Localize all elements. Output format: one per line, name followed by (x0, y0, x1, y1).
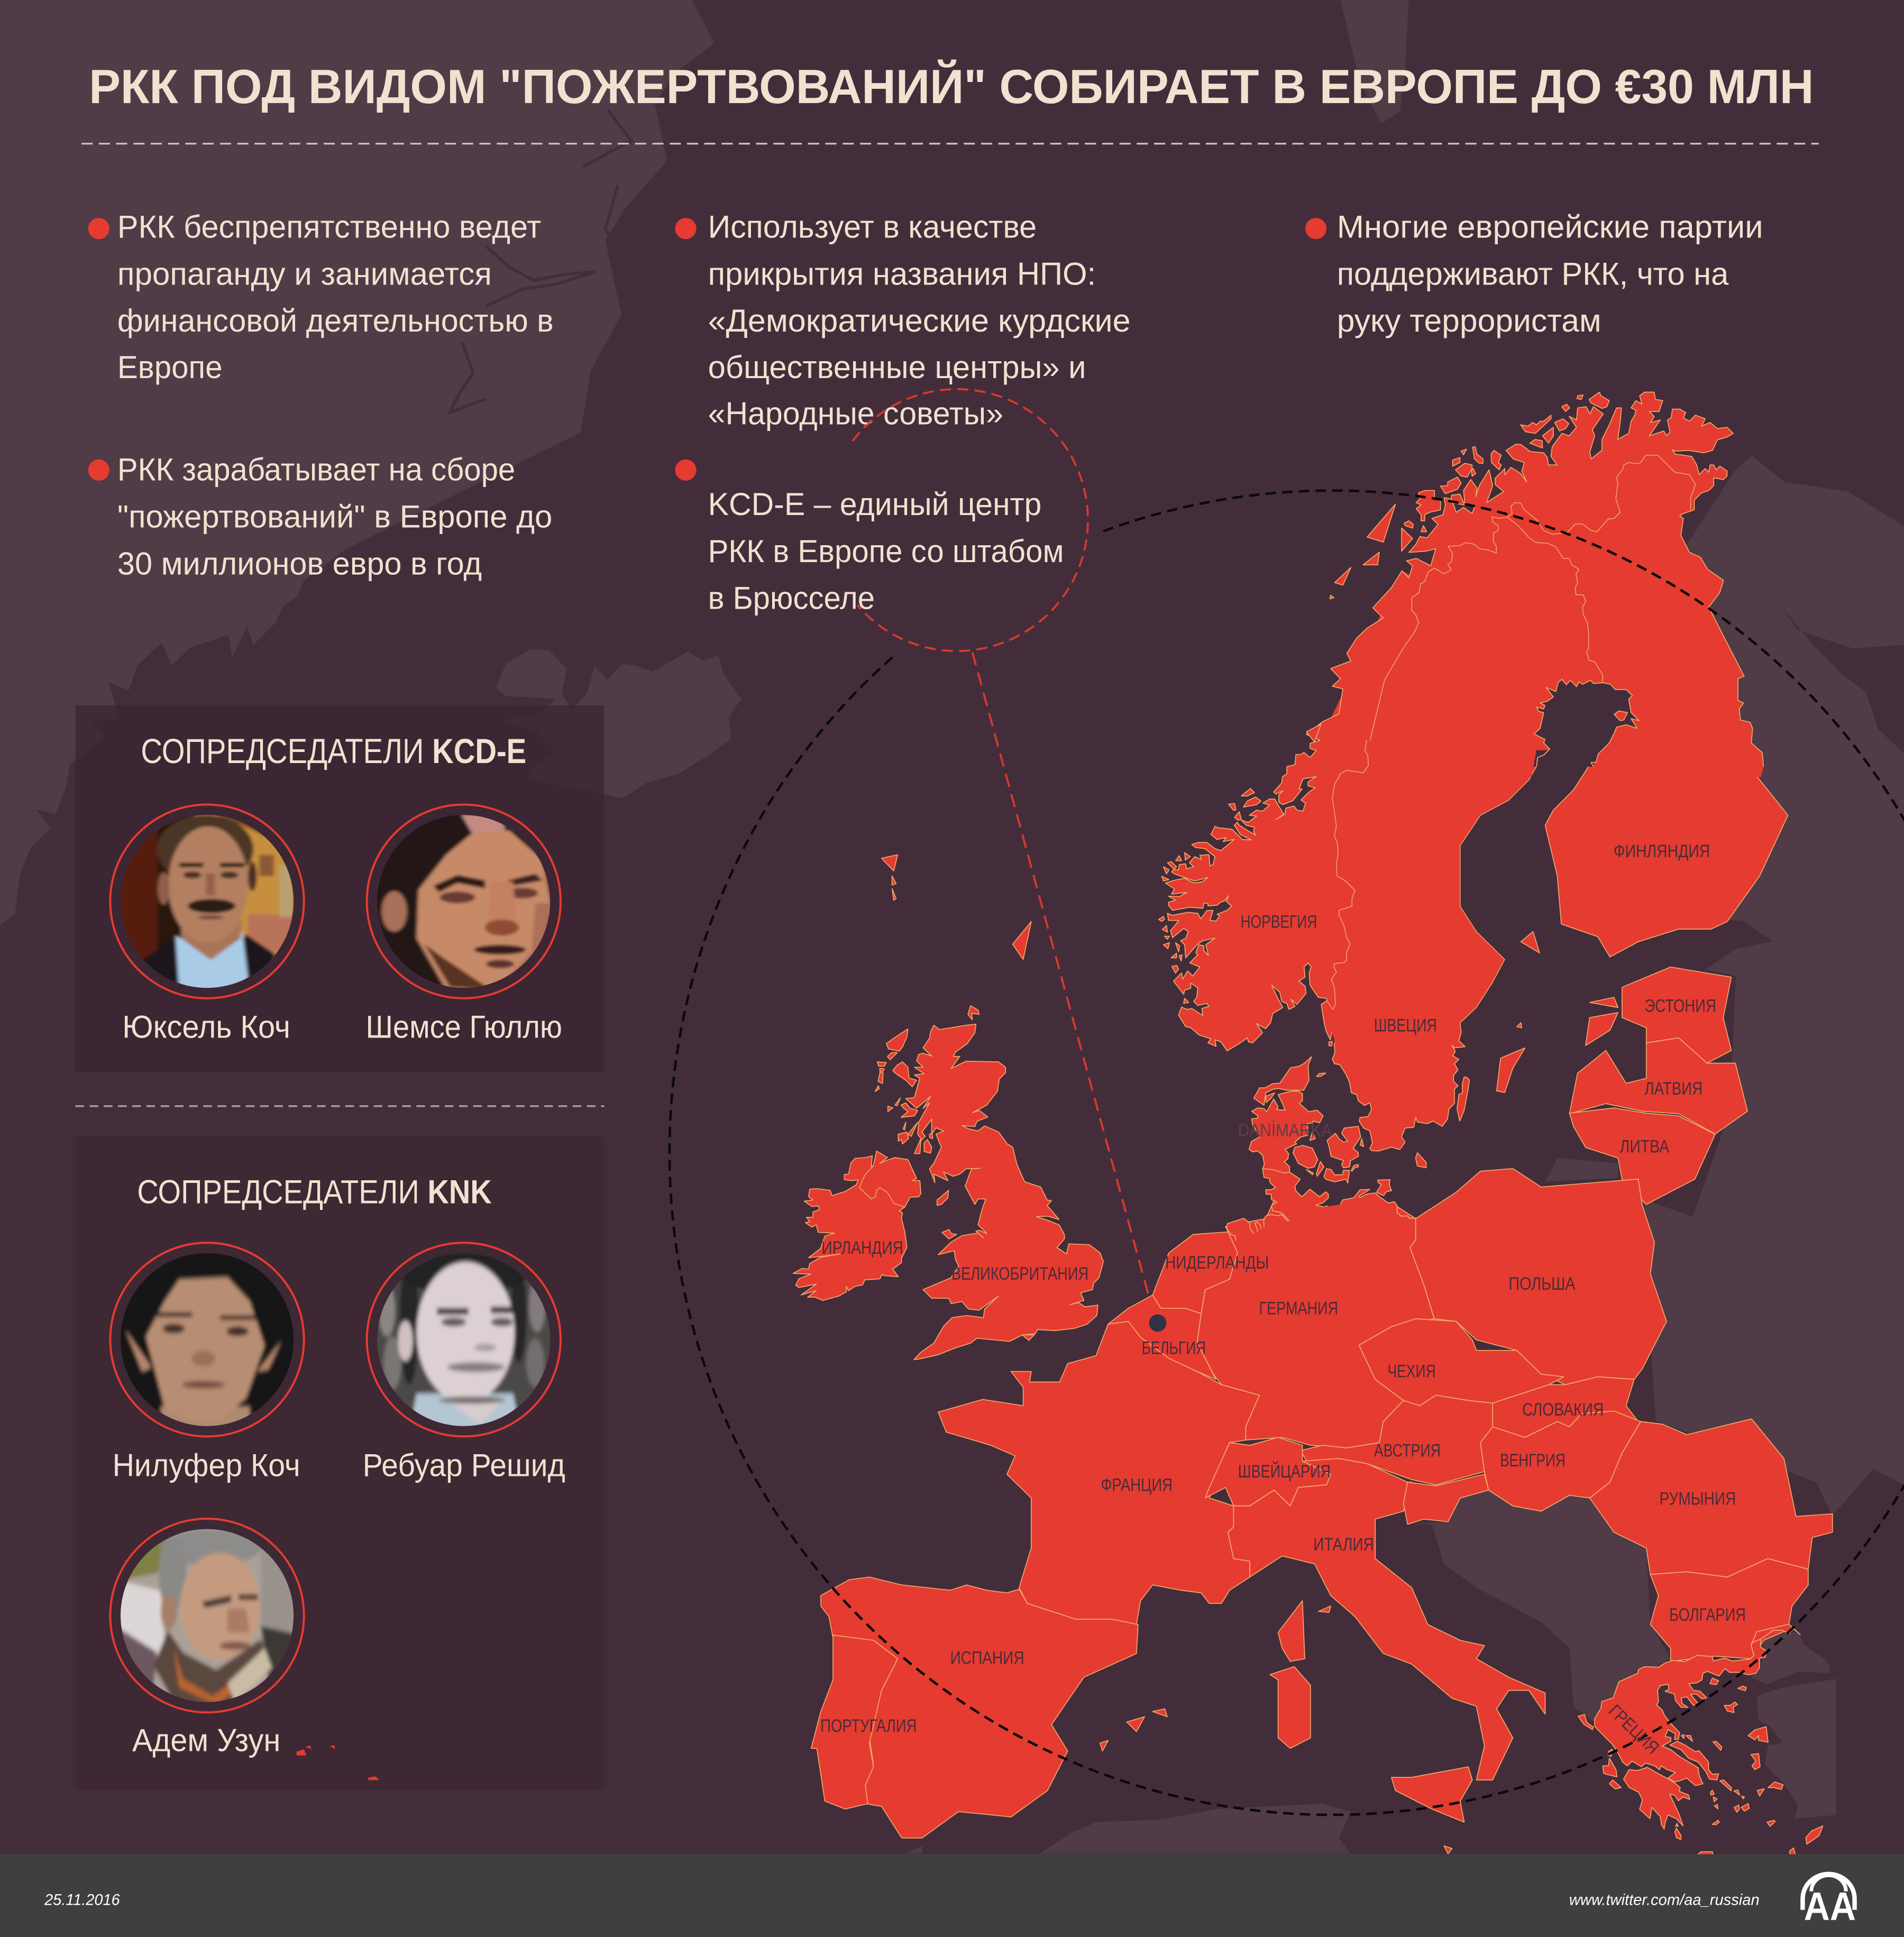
name: Nilufer Koc: Нилуфер Коч (113, 1447, 300, 1483)
Great Britain (906, 1024, 1103, 1360)
country labels: DANİMARKA (1238, 1121, 1332, 1141)
country labels: ИСПАНИЯ (950, 1648, 1024, 1668)
country labels: ЛИТВА (1620, 1137, 1669, 1157)
Greek islands (1578, 1678, 1823, 1856)
text block: propaganda: пропаганду и занимается (117, 255, 492, 291)
text block: donations (88, 452, 552, 581)
text block: NGO cover names: «Народные советы» (708, 395, 1003, 431)
Bulgaria (1650, 1558, 1808, 1661)
Germany (1197, 1200, 1434, 1448)
text block: parties (1305, 209, 1763, 338)
Denmark-Germany border (1262, 1169, 1289, 1173)
country labels: ФРАНЦИЯ (1101, 1475, 1173, 1495)
Greece (1578, 1624, 1823, 1856)
text block: NGO cover names: общественные центры» и (708, 349, 1086, 385)
seam patches: Scandinavia interior and north Germany (1242, 791, 1456, 1247)
country labels: ШВЕЦИЯ (1374, 1016, 1437, 1036)
logo: AA: AA (1804, 1884, 1856, 1928)
France (938, 1321, 1259, 1624)
country labels: АВСТРИЯ (1374, 1440, 1441, 1461)
text block: propaganda (88, 209, 554, 385)
text block: parties: Многие европейские партии (1337, 209, 1763, 245)
Switzerland (1205, 1437, 1331, 1506)
Finland south (1545, 765, 1788, 957)
country labels: ПОРТУГАЛИЯ (820, 1716, 917, 1736)
portrait: Adem Uzun (109, 1517, 304, 1714)
Norway, Sweden and Finland borders (1328, 455, 1696, 1009)
country labels (820, 841, 1746, 1758)
Danish islands and Vendsyssel (1254, 1057, 1469, 1196)
name: Semse Gullu: Шемсе Гюллю (365, 1008, 562, 1044)
country labels: НОРВЕГИЯ (1240, 912, 1317, 932)
Austria (1301, 1395, 1493, 1485)
text block: donations: 30 миллионов евро в год (117, 545, 482, 581)
source url: www.twitter.com/aa_russian (1569, 1892, 1760, 1908)
callout text: KCD-E: в Брюсселе (708, 580, 875, 616)
islands of northern Norway (1402, 392, 1627, 721)
country labels: ЧЕХИЯ (1387, 1362, 1436, 1382)
Baltic and North Atlantic islands (882, 504, 1618, 1093)
footer bar (0, 1854, 1904, 1937)
country labels: ПОЛЬША (1508, 1274, 1576, 1294)
Slovakia (1493, 1377, 1638, 1437)
central and southern Europe countries (811, 1108, 1833, 1854)
text block: propaganda: РКК беспрепятственно ведет (117, 209, 541, 245)
Hungary (1480, 1411, 1641, 1511)
title: РКК ПОД ВИДОМ "ПОЖЕРТВОВАНИЙ" СОБИРАЕТ В ЕВРОПЕ ДО €30 МЛН (89, 59, 1814, 114)
country labels: БЕЛЬГИЯ (1142, 1338, 1206, 1358)
text block: parties: поддерживают РКК, что на (1337, 255, 1728, 291)
British Isles (793, 1006, 1103, 1360)
Peloponnese (1624, 1767, 1690, 1829)
heading: KNK co-chairs: СОПРЕДСЕДАТЕЛИ KNK (137, 1173, 492, 1210)
Italy (1228, 1458, 1545, 1780)
callout text: KCD-E: KCD-E – единый центр (708, 486, 1041, 522)
Lithuania (1569, 1108, 1715, 1205)
country labels: БОЛГАРИЯ (1669, 1605, 1746, 1625)
Sweden and Norway interior (1314, 571, 1536, 1038)
portrait: Semse Gullu (367, 804, 561, 998)
country labels: ВЕЛИКОБРИТАНИЯ (951, 1264, 1088, 1284)
Ireland (793, 1151, 921, 1300)
Norway mid coast (1306, 571, 1402, 740)
country labels: ВЕНГРИЯ (1500, 1451, 1566, 1471)
country labels: НИДЕРЛАНДЫ (1165, 1253, 1269, 1273)
Poland (1410, 1169, 1667, 1384)
Jutland and German coast (1226, 1091, 1417, 1241)
Denmark and north Germany coast (1226, 1031, 1469, 1241)
Norway, Sweden and Finland north coast (1402, 392, 1763, 767)
name: Yuksel Koc: Юксель Коч (122, 1008, 290, 1044)
text block: parties: руку террористам (1337, 302, 1601, 338)
Greek mainland (1595, 1639, 1766, 1786)
Canary islands in panel (297, 1746, 379, 1780)
country labels: ГРЕЦИЯ (1605, 1701, 1663, 1758)
callout text: KCD-E (675, 460, 1064, 616)
portrait: Yuksel Koc (109, 804, 304, 998)
mid Scandinavia and Baltic states (882, 504, 1788, 1134)
country labels: СЛОВАКИЯ (1522, 1400, 1604, 1420)
Latvia (1569, 1038, 1747, 1134)
islands of southern Norway (1159, 788, 1332, 1046)
text block: NGO cover names: прикрытия названия НПО: (708, 255, 1096, 291)
Sweden east coast (1460, 767, 1536, 1031)
heading: KCD-E co-chairs: СОПРЕДСЕДАТЕЛИ KCD-E (141, 732, 526, 770)
country labels: РУМЫНИЯ (1659, 1489, 1736, 1509)
text block: propaganda: Европе (117, 349, 223, 385)
Mediterranean islands (1100, 1601, 1472, 1854)
text block: donations: РКК зарабатывает на сборе (117, 452, 515, 488)
Netherlands (1152, 1232, 1238, 1314)
country labels: ЛАТВИЯ (1644, 1079, 1702, 1099)
portrait: Rebuar Resid (367, 1240, 561, 1437)
country labels: ЭСТОНИЯ (1644, 996, 1716, 1016)
Romania (1590, 1419, 1833, 1577)
callout text: KCD-E: РКК в Европе со штабом (708, 533, 1064, 569)
name: Rebuar Resid: Ребуар Решид (363, 1447, 565, 1483)
text block: donations: "пожертвований" в Европе до (117, 499, 552, 535)
country labels: ГЕРМАНИЯ (1259, 1299, 1338, 1319)
red dashed pointer line to Brussels (973, 652, 1149, 1297)
Northern Ireland border (859, 1165, 905, 1207)
date: 25.11.2016 (44, 1892, 120, 1908)
Belgium (1108, 1295, 1216, 1380)
Portugal (811, 1635, 898, 1809)
country labels: ФИНЛЯНДИЯ (1614, 841, 1710, 861)
Czechia (1359, 1319, 1564, 1406)
black dashed circle (670, 491, 1904, 1815)
country labels: ШВЕЙЦАРИЯ (1238, 1462, 1331, 1482)
map of Europe (297, 392, 1833, 1856)
text block: NGO cover names (675, 209, 1131, 431)
red dashed callout circle (853, 389, 1088, 651)
name: Adem Uzun: Адем Узун (132, 1722, 280, 1758)
text block: propaganda: финансовой деятельностью в (117, 302, 554, 338)
panel: KNK co-chairs background (76, 1136, 604, 1790)
southern Norway (1159, 740, 1340, 1051)
Turkish Thrace (1751, 1624, 1800, 1645)
Brussels marker (1149, 1315, 1166, 1332)
country labels: ИТАЛИЯ (1313, 1535, 1374, 1555)
text block: NGO cover names: «Демократические курдские (708, 302, 1131, 338)
Scottish islands, Man, Anglesey, Wight (875, 1006, 1034, 1341)
country labels: ИРЛАНДИЯ (822, 1238, 903, 1258)
Spain (821, 1577, 1138, 1838)
Estonia (1622, 967, 1731, 1063)
northern Scandinavia (1402, 392, 1763, 777)
portrait: Nilufer Koc (109, 1240, 304, 1437)
south Sweden (1332, 1031, 1465, 1151)
text block: NGO cover names: Использует в качестве (708, 209, 1037, 245)
panel: KCD-E co-chairs background (76, 705, 604, 1072)
Gulf of Bothnia north (1534, 680, 1639, 767)
Slovenia and Croatia (1404, 1474, 1488, 1525)
